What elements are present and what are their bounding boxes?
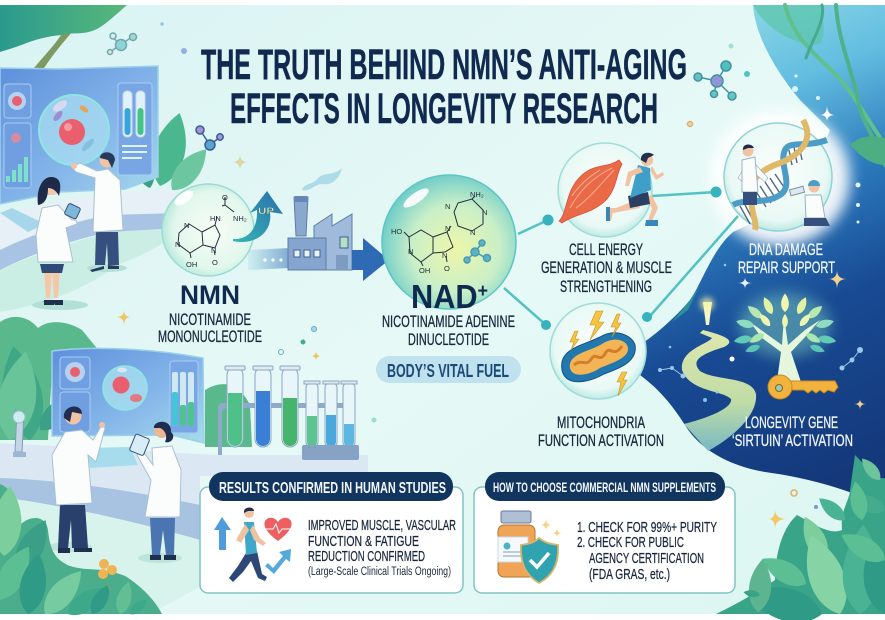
icon: NMN bubble with molecule: HN xyxy=(210,214,221,223)
icon: NMN bubble with molecule xyxy=(162,184,254,276)
lower background bushes xyxy=(0,317,252,447)
connector NAD to muscle xyxy=(518,214,554,234)
text: NAD full name: DINUCLEOTIDE xyxy=(408,330,489,349)
scientist: woman lower xyxy=(129,422,181,560)
label: mitochondria xyxy=(538,413,664,450)
heading: NMN: NMN xyxy=(180,280,240,310)
panel: results confirmed in human studies: RESULTS CONFIRMED IN HUMAN STUDIES xyxy=(219,480,446,497)
label: mitochondria: MITOCHONDRIA xyxy=(557,413,645,432)
scientist: man lower xyxy=(52,406,105,553)
icon: walker with heart and arrows xyxy=(214,507,295,582)
lab screen upper xyxy=(0,66,158,204)
icon: NAD bubble with molecule: N xyxy=(482,208,487,217)
icon: NMN bubble with molecule: NH₂ xyxy=(233,214,247,223)
text: results body: FUNCTION & FATIGUE xyxy=(308,533,419,550)
icon: NMN bubble with molecule: O xyxy=(222,193,228,202)
decorative dots lower centre xyxy=(116,310,376,422)
icon: NMN bubble with molecule: N xyxy=(175,240,180,249)
icon: NAD bubble with molecule: N xyxy=(408,247,413,256)
text: results body: IMPROVED MUSCLE, VASCULAR xyxy=(308,517,456,534)
icon: NAD bubble with molecule xyxy=(382,175,516,309)
arrow dotted flow NMN to factory xyxy=(248,248,290,270)
text: checklist: AGENCY CERTIFICATION xyxy=(589,550,704,567)
label: DNA repair xyxy=(738,240,835,277)
heading: NAD+: NAD xyxy=(411,278,482,315)
text: NMN full name: NICOTINAMIDE xyxy=(169,310,251,329)
molecule: center left xyxy=(196,126,223,150)
night-sky longevity backdrop xyxy=(640,5,885,507)
label: mitochondria: FUNCTION ACTIVATION xyxy=(538,431,664,450)
scientist: woman upper xyxy=(36,177,81,305)
text: NAD full name xyxy=(382,312,515,349)
icon: NAD bubble with molecule: N xyxy=(445,202,450,211)
text: NAD full name: NICOTINAMIDE ADENINE xyxy=(382,312,515,331)
icon: NAD bubble with molecule: N xyxy=(470,228,475,237)
text: results body xyxy=(308,517,456,578)
heading: NAD+: + xyxy=(478,281,488,302)
label: cell energy: STRENGTHENING xyxy=(560,277,652,296)
icon: supplement bottle and shield xyxy=(498,511,562,583)
lower bench xyxy=(0,410,368,614)
lab screen lower xyxy=(52,348,204,443)
foreground leaves bottom left xyxy=(0,484,162,620)
connector NAD to mitochondria xyxy=(504,288,551,330)
icon: NAD bubble with molecule: O xyxy=(444,264,450,273)
text: checklist: 1. CHECK FOR 99%+ PURITY xyxy=(577,519,717,536)
icon: golden key xyxy=(768,375,838,399)
label: longevity gene xyxy=(732,413,853,450)
foreground leaves bottom right xyxy=(716,455,885,620)
scientist: man upper xyxy=(71,152,123,272)
label: cell energy xyxy=(541,240,672,296)
text: results body: (Large-Scale Clinical Trials Ongoing) xyxy=(308,566,451,578)
tree canopy top left xyxy=(0,5,127,68)
icon: NAD bubble with molecule: HO xyxy=(391,227,402,236)
icon: NMN bubble with molecule: N xyxy=(211,246,216,255)
label: DNA repair: DNA DAMAGE xyxy=(749,240,823,259)
text: checklist: (FDA GRAS, etc.) xyxy=(589,566,670,583)
text: NMN full name xyxy=(158,310,262,346)
icon: NMN bubble with molecule: OH xyxy=(186,260,197,269)
sparkle xyxy=(232,154,248,171)
icon: NMN bubble with molecule: N xyxy=(184,221,189,230)
icon: glowing winding path xyxy=(682,297,756,451)
text: checklist: 2. CHECK FOR PUBLIC xyxy=(577,534,684,551)
connector mitochondria to DNA xyxy=(642,216,738,322)
text: checklist xyxy=(577,519,717,583)
text: results body: REDUCTION CONFIRMED xyxy=(308,548,425,565)
panel: how to choose commercial NMN supplements: HOW TO CHOOSE COMMERCIAL NMN SUPPLEMENTS xyxy=(493,479,716,495)
icon: test tube rack xyxy=(218,366,359,460)
decorative dots xyxy=(160,22,187,54)
constellations and stars xyxy=(658,264,862,402)
panel: results confirmed in human studies xyxy=(200,472,463,593)
arrow: UP curved arrow: UP xyxy=(258,206,275,217)
icon: factory xyxy=(288,196,352,270)
icon: NMN bubble with molecule: O xyxy=(212,258,218,267)
icon: smoke xyxy=(302,168,342,190)
icon: NAD bubble with molecule: OH xyxy=(419,266,430,275)
connector runner to DNA xyxy=(652,186,722,198)
vines top right xyxy=(785,5,885,224)
icon: mitochondria circle xyxy=(550,303,646,399)
cell hologram lower xyxy=(103,366,147,410)
molecule: top right xyxy=(688,44,750,126)
icon: NAD bubble with molecule: N xyxy=(445,224,450,233)
title xyxy=(201,41,687,133)
plant behind upper lab xyxy=(132,109,215,197)
panel: how to choose commercial NMN supplements xyxy=(474,472,735,593)
label: cell energy: GENERATION & MUSCLE xyxy=(541,258,672,277)
badge: body's vital fuel xyxy=(376,356,521,383)
upper desk xyxy=(0,190,178,312)
label: cell energy: CELL ENERGY xyxy=(569,240,643,259)
label: DNA repair: REPAIR SUPPORT xyxy=(738,258,835,277)
decorative dots lower right xyxy=(768,490,818,529)
icon: NAD bubble with molecule: N xyxy=(442,251,447,260)
molecule: top left xyxy=(108,33,136,54)
icon: DNA repair circle xyxy=(724,120,832,231)
icon: tree of life xyxy=(733,293,837,388)
text: NMN full name: MONONUCLEOTIDE xyxy=(158,327,262,346)
icon: muscle and runner circle xyxy=(558,143,664,237)
sparkles on night sky xyxy=(738,270,866,410)
icon: yellow flower xyxy=(98,559,117,590)
badge: body's vital fuel: BODY’S VITAL FUEL xyxy=(387,361,509,381)
cell hologram upper xyxy=(39,95,109,165)
arrow: factory to NAD xyxy=(352,238,389,281)
arrow: UP curved arrow xyxy=(233,191,283,242)
icon: NAD bubble with molecule: NH₂ xyxy=(470,190,484,199)
